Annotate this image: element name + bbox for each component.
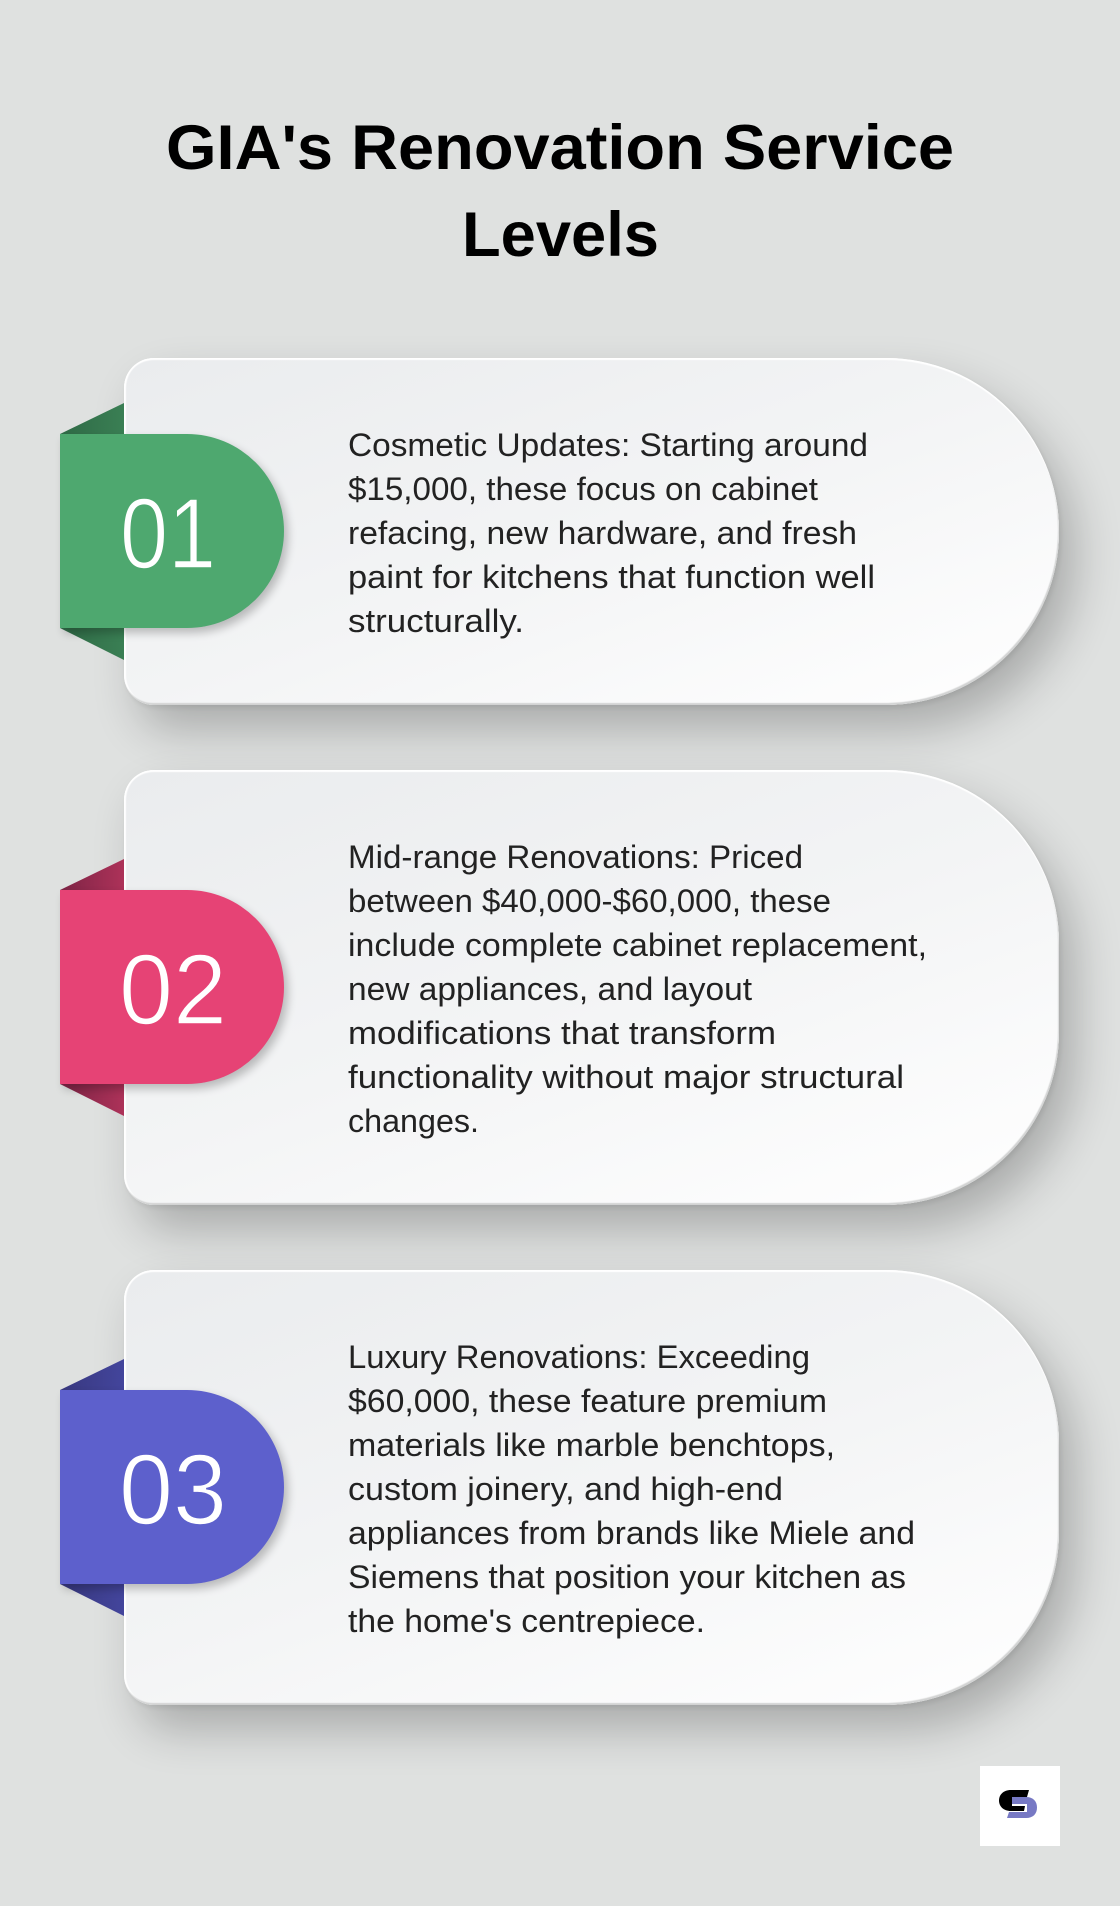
panel: cosmetic updates xyxy=(60,358,1096,752)
number 01: 01 xyxy=(120,478,216,590)
panel: mid-range renovations xyxy=(60,770,1098,1252)
description text: changes. xyxy=(348,1103,479,1139)
ribbon folds xyxy=(60,403,124,660)
description text: Luxury Renovations: Exceeding xyxy=(348,1339,810,1375)
description text xyxy=(348,427,875,639)
card background xyxy=(124,770,1059,1205)
panel: luxury renovations xyxy=(60,1270,1098,1752)
description text: paint for kitchens that function well xyxy=(348,559,875,595)
description text: appliances from brands like Miele and xyxy=(348,1515,915,1551)
description text: Mid-range Renovations: Priced xyxy=(348,839,803,875)
title: GIA's Renovation Service xyxy=(166,113,954,183)
description text: Siemens that position your kitchen as xyxy=(348,1559,906,1595)
number 02: 02 xyxy=(119,934,227,1046)
card background xyxy=(124,358,1059,705)
number badge 03 xyxy=(60,1390,284,1584)
description text: include complete cabinet replacement, xyxy=(348,927,927,963)
description text: structurally. xyxy=(348,603,524,639)
description text: the home's centrepiece. xyxy=(348,1603,705,1639)
number 03: 03 xyxy=(119,1434,227,1546)
description text: functionality without major structural xyxy=(348,1059,904,1095)
description text: refacing, new hardware, and fresh xyxy=(348,515,857,551)
description text: custom joinery, and high-end xyxy=(348,1471,783,1507)
description text: $15,000, these focus on cabinet xyxy=(348,471,818,507)
description text: materials like marble benchtops, xyxy=(348,1427,835,1463)
number badge 02 xyxy=(60,890,284,1084)
title xyxy=(166,113,954,270)
icon: logo xyxy=(980,1766,1060,1846)
description text xyxy=(348,839,927,1139)
description text: between $40,000-$60,000, these xyxy=(348,883,831,919)
description text: new appliances, and layout xyxy=(348,971,752,1007)
title: Levels xyxy=(462,200,659,270)
number badge 01 xyxy=(60,434,284,628)
description text: modifications that transform xyxy=(348,1015,776,1051)
card background xyxy=(124,1270,1059,1705)
ribbon folds xyxy=(60,859,124,1116)
description text: Cosmetic Updates: Starting around xyxy=(348,427,868,463)
description text: $60,000, these feature premium xyxy=(348,1383,827,1419)
